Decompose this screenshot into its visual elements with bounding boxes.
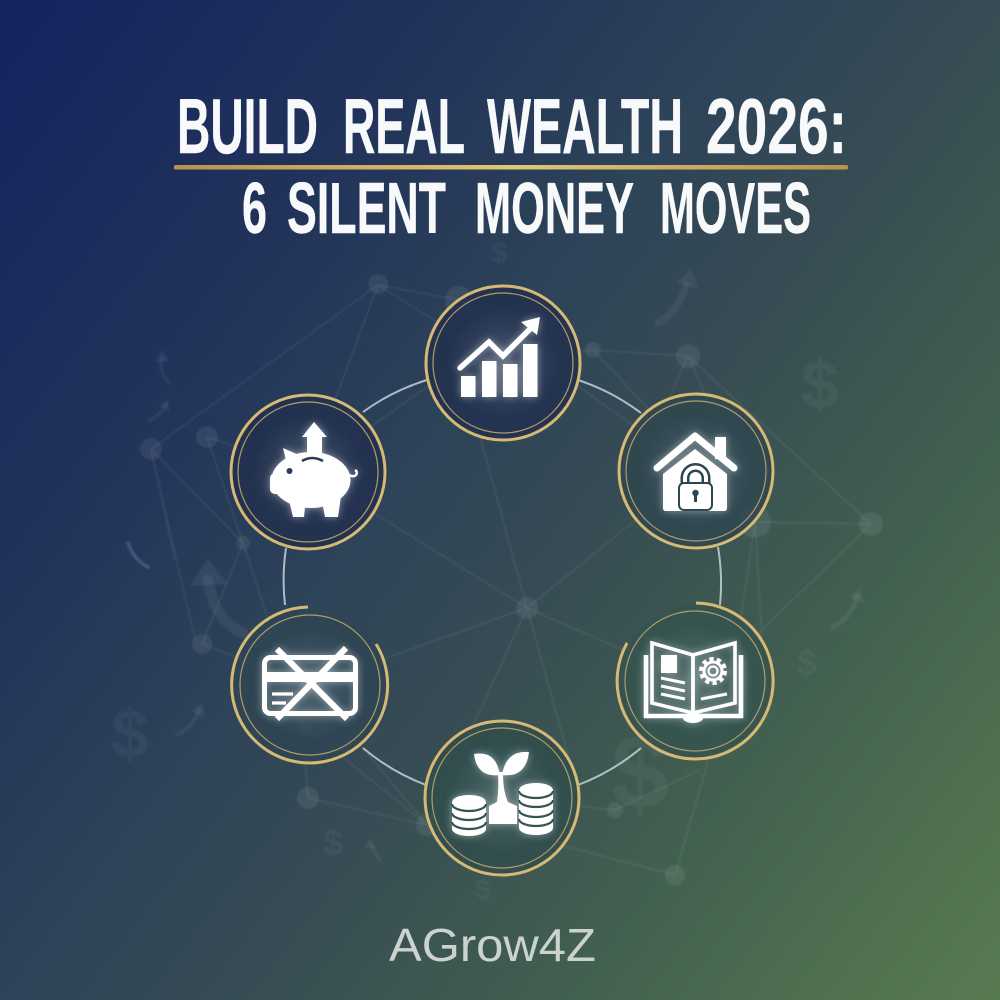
title: MONEY xyxy=(475,169,634,249)
icon: house with padlock xyxy=(657,436,734,511)
faint dollar signs: $ xyxy=(491,237,508,270)
faint growth arrows xyxy=(128,269,864,860)
icon: piggy bank with up arrow xyxy=(270,422,357,517)
connecting ring xyxy=(284,380,721,785)
node: growing coins xyxy=(425,721,579,875)
faint dollar signs xyxy=(111,237,839,905)
faint dollar signs: $ xyxy=(801,347,839,423)
faint dollar signs: $ xyxy=(797,642,817,683)
title: SILENT xyxy=(287,169,446,249)
title: 2026: xyxy=(706,82,847,170)
title: BUILD xyxy=(177,82,318,170)
faint dollar signs: $ xyxy=(475,874,491,905)
background network of faint lines and nodes xyxy=(140,274,883,885)
node: education book xyxy=(617,603,773,759)
icon: rising bar chart xyxy=(460,317,540,397)
faint dollar signs: $ xyxy=(611,715,669,831)
node: no credit card xyxy=(232,607,388,763)
brand name: AGrow4Z xyxy=(389,919,596,971)
node: growth chart xyxy=(426,286,580,440)
title: 6 xyxy=(242,169,267,249)
faint dollar signs: $ xyxy=(111,696,149,772)
title: REAL xyxy=(343,82,465,170)
node: secured home xyxy=(619,394,773,548)
node: piggy bank xyxy=(231,395,385,549)
title: WEALTH xyxy=(487,82,683,170)
faint dollar signs: $ xyxy=(323,822,343,863)
icon: sprout and coin stacks xyxy=(452,752,553,836)
title: MOVES xyxy=(660,169,811,249)
icon: open book with gear xyxy=(646,643,741,723)
title xyxy=(177,82,847,249)
icon: crossed out credit card xyxy=(264,648,356,719)
gold divider xyxy=(174,165,848,170)
